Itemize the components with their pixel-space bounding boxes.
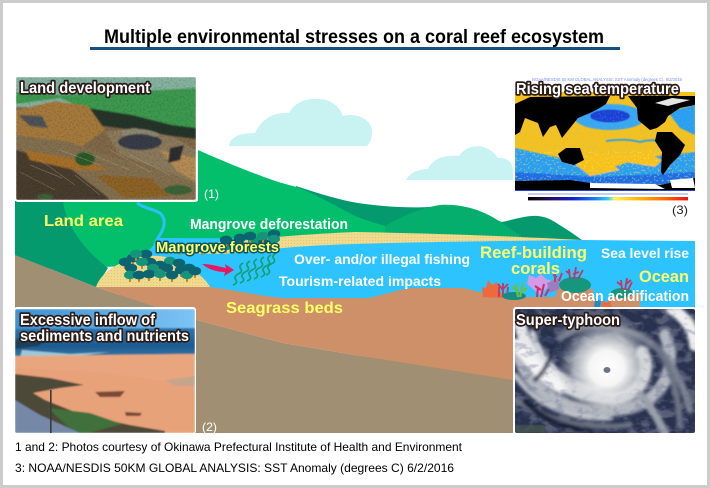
credit mark 3: (3): [672, 203, 688, 217]
photo credits: [15, 440, 463, 475]
mangrove trees: [119, 230, 280, 282]
dark green slope: [15, 201, 108, 287]
label: reef-building corals: corals: [511, 259, 560, 278]
sand: beach strip: [165, 232, 582, 254]
label: reef-building corals: Reef-building: [480, 243, 587, 262]
photo label: Rising sea temperature: [516, 81, 679, 98]
label: mangrove forests: Mangrove forests: [156, 239, 279, 256]
scene labels: [44, 213, 689, 317]
photo: land development: [15, 76, 198, 202]
photo credits: 1 and 2: Photos courtesy of Okinawa Prefectural Institute of Health and Environment: [15, 440, 463, 454]
photo label: Excessive inflow of: [20, 312, 156, 329]
back hills: [296, 186, 582, 240]
photo label: sediments and nutrients: [20, 328, 189, 345]
photo: excessive inflow: [14, 307, 196, 434]
sea temperature map: [515, 77, 695, 200]
label: land area: Land area: [44, 213, 123, 230]
land area: [15, 150, 450, 270]
label: fishing: Over- and/or illegal fishing: [294, 251, 470, 267]
label: ocean acidification: Ocean acidification: [561, 289, 689, 305]
label: mangrove deforestation: Mangrove deforestation: [190, 217, 348, 233]
label: tourism: Tourism-related impacts: [279, 273, 441, 289]
deep sediment layer: [15, 255, 513, 433]
label: ocean: Ocean: [639, 267, 689, 286]
sand: mangrove shore: [96, 256, 210, 287]
colour scale: [515, 190, 695, 200]
cloud: left: [229, 99, 372, 146]
illustrated coastal scene: [15, 150, 695, 433]
corals: [482, 267, 633, 308]
map header: NOAA/NESDIS 50 KM GLOBAL ANALYSIS: SST Anomaly (degrees C), 6/2/2016: [532, 77, 682, 82]
landmasses: [515, 96, 610, 138]
photo credits: 3: NOAA/NESDIS 50KM GLOBAL ANALYSIS: SST Anomaly (degrees C) 6/2/2016: [15, 461, 454, 475]
middle hill: [385, 205, 526, 240]
photo label: [20, 312, 189, 345]
impact arrow: [202, 264, 234, 276]
label: sea level rise: Sea level rise: [601, 245, 689, 261]
seabed: [96, 287, 640, 380]
ocean water: [120, 238, 695, 312]
photo: super-typhoon: [513, 307, 696, 434]
title: Multiple environmental stresses on a coral reef ecosystem: [104, 27, 604, 48]
credit mark 2: (2): [202, 420, 217, 434]
credit mark 1: (1): [204, 187, 219, 201]
photo label: Super-typhoon: [516, 312, 620, 329]
label: seagrass beds: Seagrass beds: [226, 300, 343, 317]
seagrass: [233, 253, 276, 285]
label: reef-building corals: [480, 243, 587, 278]
photo label: Land development: [20, 80, 150, 97]
river: [137, 203, 164, 251]
cloud: right: [406, 146, 513, 180]
